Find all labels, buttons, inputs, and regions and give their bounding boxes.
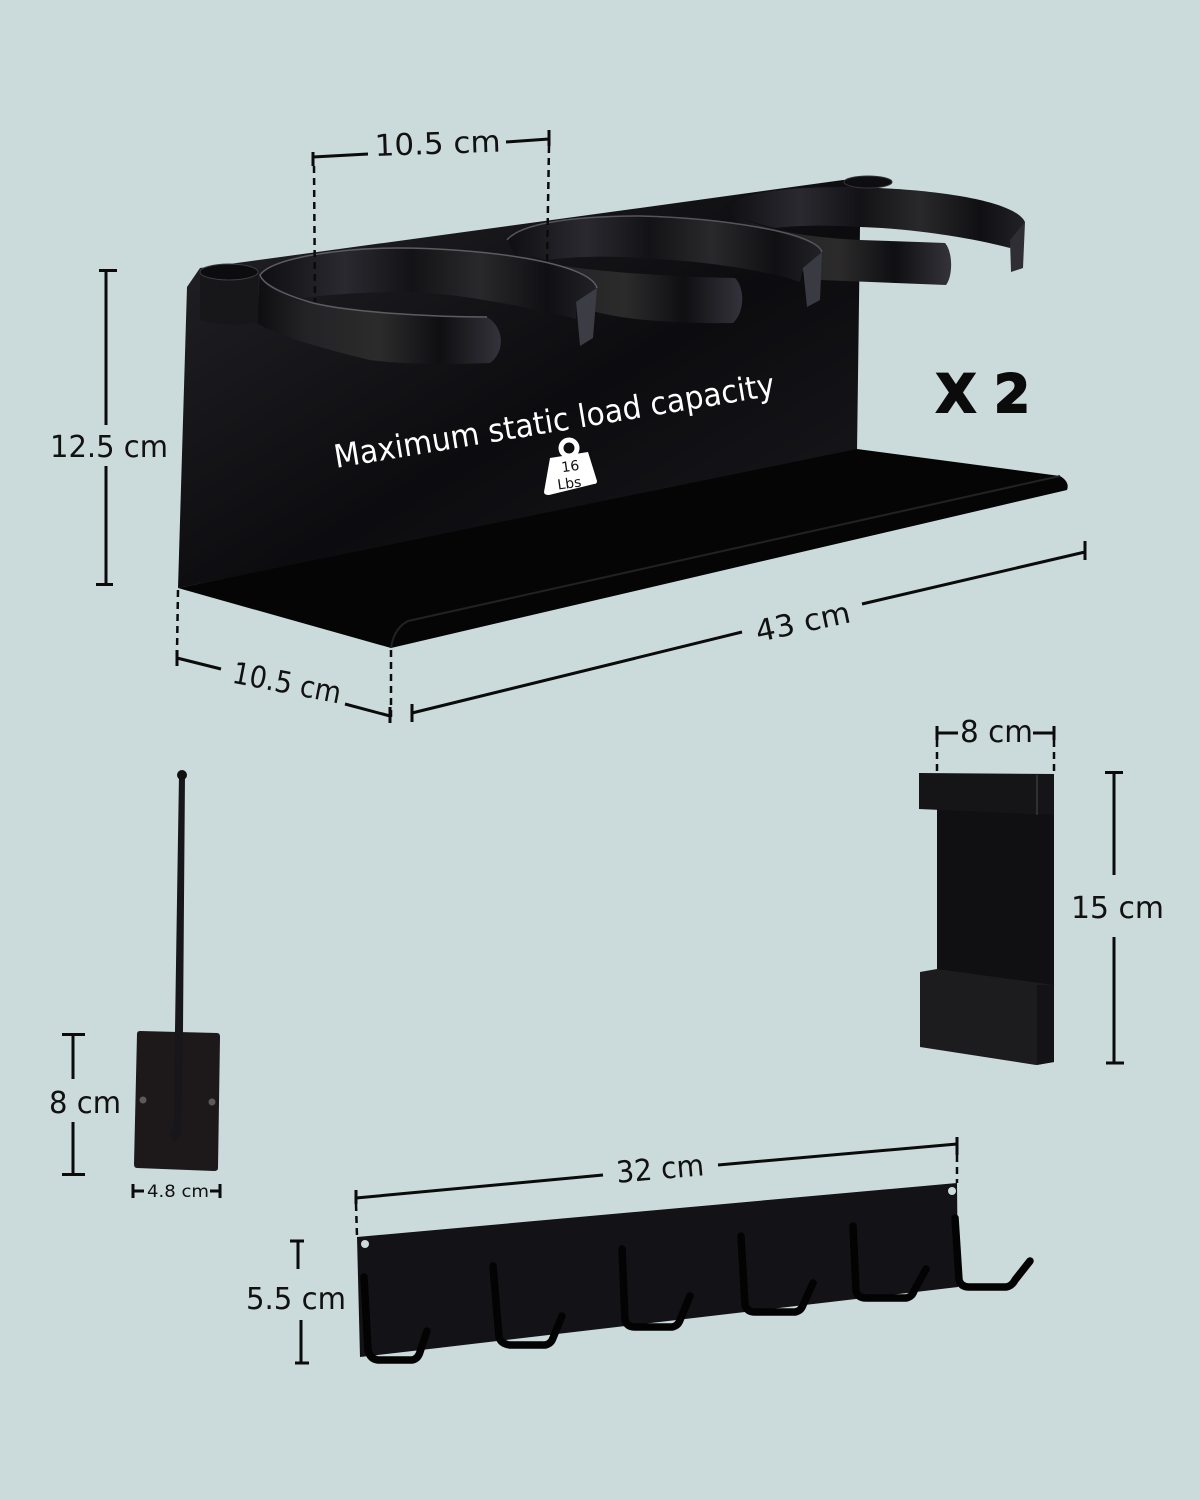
dimension: plate height 8 cm: 8 cm <box>49 1086 121 1121</box>
dimension: bracket height 15 cm <box>1071 772 1164 1063</box>
dimension: height 12.5 cm: 12.5 cm <box>50 430 168 465</box>
icon: 16 lbs weight: 16 <box>561 458 580 476</box>
ring three <box>725 176 1025 285</box>
dimension: height 12.5 cm <box>50 270 168 585</box>
dimension: bracket width 8 cm: 8 cm <box>960 715 1033 750</box>
dimension: depth 10.5 cm <box>177 590 390 723</box>
hooks <box>364 1218 1030 1360</box>
dimension: bracket width 8 cm <box>937 715 1054 772</box>
dimension: rail height 5.5 cm <box>246 1241 346 1363</box>
small tube holder <box>200 264 258 325</box>
front lip highlight <box>391 476 1060 648</box>
dimension: length 43 cm: 43 cm <box>752 596 854 650</box>
dimension: plate width 4.8 cm <box>133 1182 220 1202</box>
ring one <box>257 248 597 364</box>
dimension: rail length 32 cm: 32 cm <box>615 1148 706 1191</box>
ring two <box>507 216 822 323</box>
hook rail <box>357 1183 1030 1360</box>
mounting plate <box>134 1031 220 1171</box>
bracket <box>919 773 1054 1065</box>
shelf back panel <box>178 178 872 588</box>
icon: 16 lbs weight <box>544 440 597 495</box>
bracket back plate <box>937 805 1054 985</box>
main shelf with cup rings <box>178 176 1068 648</box>
load capacity label: Maximum static load capacity <box>331 366 777 476</box>
dimension: depth 10.5 cm: 10.5 cm <box>229 656 344 711</box>
wall hook rod with plate <box>134 770 220 1171</box>
dimension: cup spacing 10.5 cm <box>313 125 549 302</box>
X 2 quantity label: X 2 <box>936 364 1030 425</box>
bracket lower pocket <box>920 969 1054 1065</box>
dimension: cup spacing 10.5 cm: 10.5 cm <box>374 125 501 164</box>
rod <box>170 775 185 1143</box>
dimension: plate width 4.8 cm: 4.8 cm <box>147 1182 209 1202</box>
dimension: bracket height 15 cm: 15 cm <box>1071 891 1164 926</box>
rail plate <box>357 1183 958 1357</box>
icon: 16 lbs weight: Lbs <box>556 474 582 494</box>
dimension: rail height 5.5 cm: 5.5 cm <box>246 1282 346 1317</box>
dimension: length 43 cm <box>391 541 1085 722</box>
dimension: rail length 32 cm <box>356 1137 957 1236</box>
bracket top cap <box>919 773 1054 815</box>
shelf floor and front lip <box>178 449 1068 648</box>
dimension: plate height 8 cm <box>49 1034 121 1174</box>
